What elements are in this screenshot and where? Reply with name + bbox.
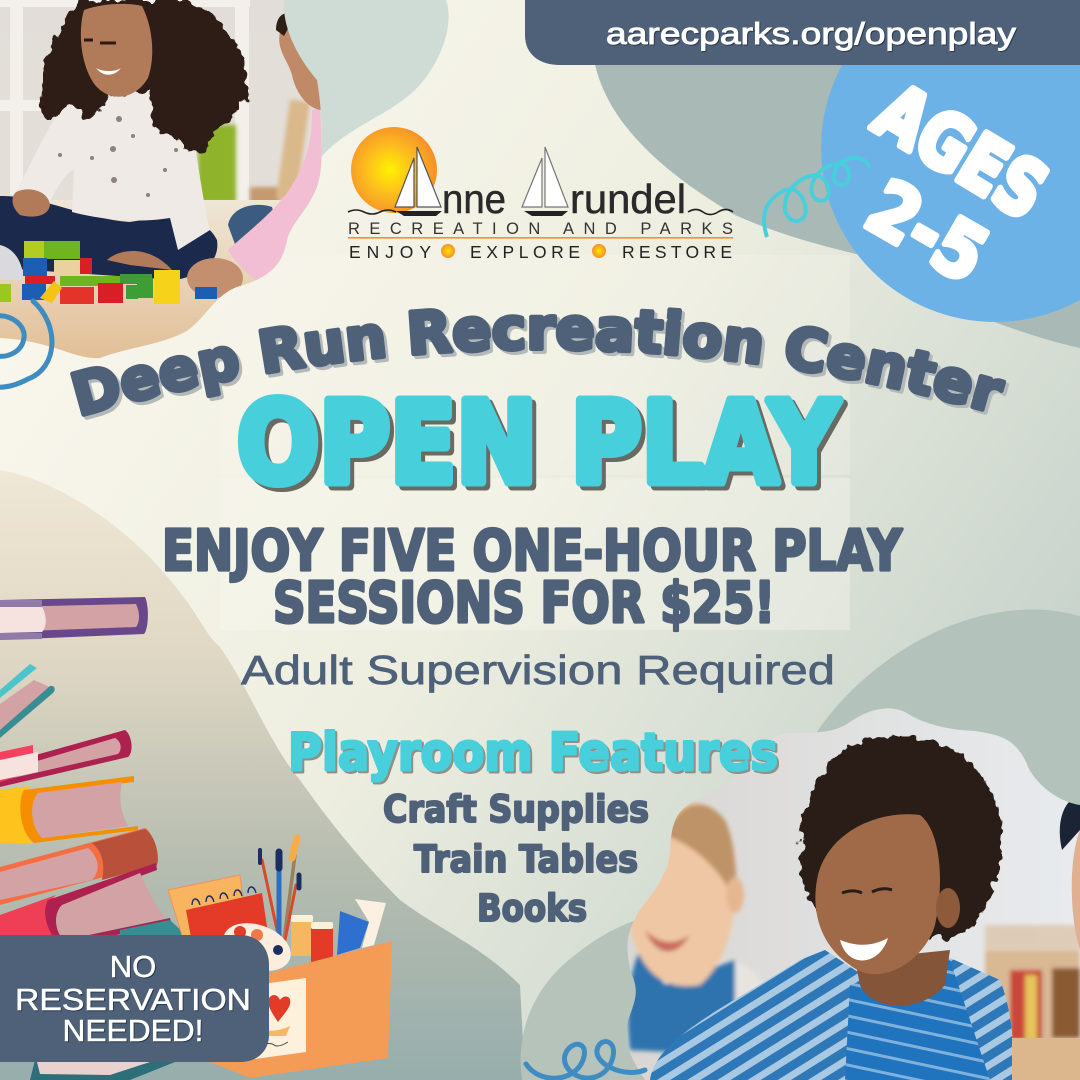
paint tubes: [337, 899, 386, 955]
blob: bottom left: [0, 470, 525, 1080]
second child hand: [187, 258, 243, 298]
illustration: book stack: [0, 597, 186, 1080]
book: red: [0, 863, 172, 945]
bookshelf: [982, 923, 1080, 1038]
squiggle: blue bottom: [526, 1042, 645, 1078]
box front: [205, 941, 392, 1078]
age text line 2: 2-5: [852, 162, 1002, 300]
blob: top right: [594, 60, 1080, 348]
book: purple: [0, 597, 148, 640]
blocks: [0, 241, 217, 304]
feature: train tables: Train Tables: [414, 838, 638, 881]
feature: craft supplies: Craft Supplies: [383, 788, 649, 831]
shelf: [0, 0, 250, 200]
blue circle: ages: [821, 0, 1080, 322]
orange sketchpad: [168, 875, 248, 945]
blob: bottom right: [815, 609, 1080, 820]
curved title: Deep Run Recreation Center: [70, 307, 1009, 420]
swirl: blue spiral top left: [0, 301, 52, 387]
blob: bottom centre: [521, 915, 680, 1080]
table: [1012, 1038, 1080, 1080]
callout text: NO: [110, 949, 156, 984]
girl shirt: [16, 85, 210, 250]
paint brushes: [260, 838, 299, 950]
red notebook: [186, 887, 272, 960]
far right child: [1060, 802, 1080, 850]
callout text: [15, 949, 251, 1048]
subheading line 2: SESSIONS FOR $25!: [273, 571, 775, 636]
squiggle: teal: [764, 158, 870, 237]
sailboat left: [395, 147, 442, 216]
book: bottom: [30, 1060, 180, 1080]
book: yellow: [0, 776, 138, 844]
url pill: [525, 0, 1080, 65]
main child face: [815, 814, 940, 974]
blob: top centre: [280, 0, 449, 158]
paint jars: [291, 915, 333, 964]
logo: rundel: [570, 176, 686, 222]
callout text: NEEDED!: [62, 1013, 204, 1048]
logo: RESTORE: [622, 242, 732, 262]
sailboat right: [522, 147, 568, 216]
girl hair: [40, 0, 248, 153]
girl hands: [13, 189, 50, 217]
logo: EXPLORE: [470, 242, 580, 262]
logo subtitle: RECREATION AND PARKS: [348, 220, 733, 238]
photo: girl playing with blocks: [0, 0, 330, 360]
callout: no reservation needed: [0, 935, 269, 1062]
book: orange brown: [0, 828, 158, 905]
logo: [348, 127, 733, 262]
girl sock: [0, 245, 24, 280]
book: crimson: [0, 730, 132, 787]
supervision note: Adult Supervision Required: [241, 647, 835, 693]
main child hair: [800, 736, 1002, 940]
water line: [348, 210, 733, 214]
second child face: [279, 25, 321, 110]
url text: aarecparks.org/openplay: [606, 16, 1017, 51]
callout text: RESERVATION: [15, 982, 251, 1017]
box label: [255, 978, 306, 1059]
left boy: [628, 803, 772, 1055]
headline: open play: OPEN PLAY: [237, 379, 841, 509]
feature: books: Books: [477, 887, 587, 930]
features heading: Playroom Features: [288, 723, 778, 783]
second child sleeve: [228, 108, 322, 282]
second child leg: [228, 204, 273, 244]
logo wordmark: nne: [442, 176, 506, 222]
photo: smiling children: [610, 700, 1080, 1080]
girl face: [81, 4, 152, 97]
logo tagline: ENJOY: [349, 242, 431, 262]
girl jeans: [0, 196, 217, 280]
subheading line 1: ENJOY FIVE ONE-HOUR PLAY: [162, 519, 903, 584]
main child neck and sweater: [650, 950, 1014, 1080]
palette: [217, 914, 297, 980]
features list: [383, 788, 649, 930]
illustration: art supply box: [168, 838, 392, 1078]
book: teal open: [0, 664, 55, 738]
